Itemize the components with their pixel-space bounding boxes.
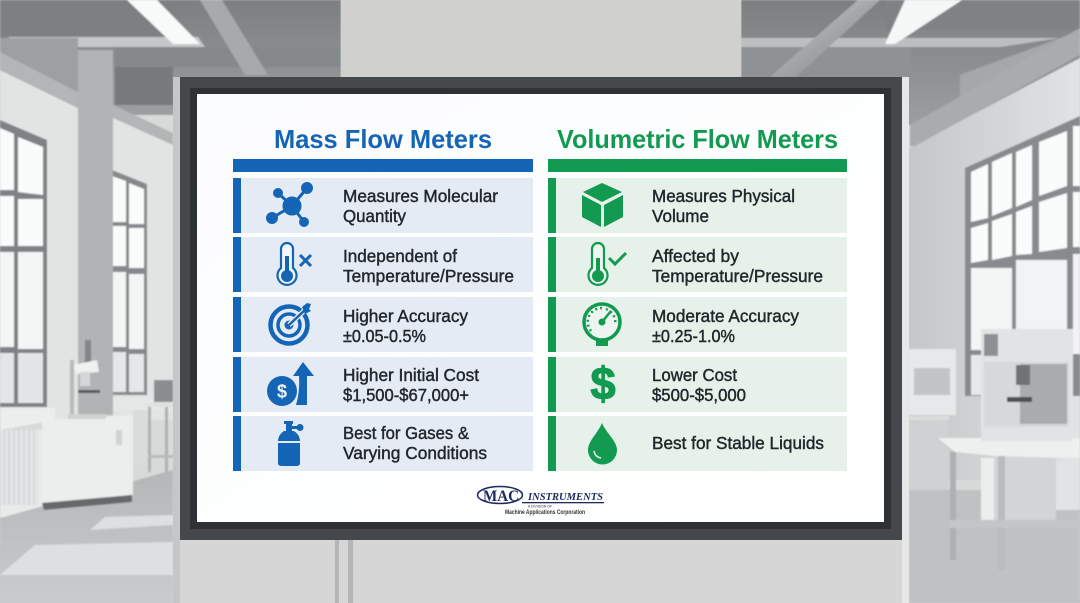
row: higher accuracy: Higher Accuracy — [343, 306, 468, 326]
row: independent of temperature: Temperature/Pressure — [343, 266, 514, 286]
row: affected by temperature: Temperature/Pressure — [652, 266, 823, 286]
row: stable liquids: Best for Stable Liquids — [652, 433, 824, 453]
row: affected by temperature: Affected by — [652, 246, 739, 266]
heading bar blue — [233, 159, 533, 172]
row: lower cost — [548, 357, 847, 412]
left column — [78, 50, 113, 415]
right windows — [965, 116, 1080, 396]
right ceiling — [741, 0, 1080, 125]
row: best for gases: Best for Gases & — [343, 423, 469, 443]
panel: mass flow meters — [233, 124, 533, 471]
row: best for gases — [233, 416, 533, 471]
left sill and lower wall — [0, 408, 55, 430]
left laptop — [154, 380, 173, 402]
row: molecular quantity: Quantity — [343, 206, 406, 226]
row: molecular quantity: Measures Molecular — [343, 186, 498, 206]
icon: target with arrow — [270, 303, 311, 344]
right wall — [909, 58, 1080, 480]
display frame — [180, 77, 902, 540]
radiator — [0, 430, 38, 505]
logo: MAC Instruments: Machine Applications Corporation — [505, 510, 585, 516]
heading: mass flow meters: Mass Flow Meters — [274, 124, 492, 154]
row: molecular quantity — [233, 178, 533, 233]
right background machine — [909, 349, 956, 490]
row: higher accuracy — [233, 297, 533, 352]
row: moderate accuracy: ±0.25-1.0% — [652, 326, 735, 346]
row: lower cost: Lower Cost — [652, 365, 737, 385]
left ceiling — [0, 0, 341, 115]
logo: MAC Instruments: MAC — [483, 488, 519, 505]
row: lower cost: $500-$5,000 — [652, 385, 746, 405]
background table and cabinet — [133, 403, 173, 472]
logo: MAC Instruments: INSTRUMENTS — [527, 492, 603, 503]
panel: volumetric flow meters — [548, 124, 847, 471]
icon: dollar sign: $ — [590, 358, 616, 409]
icon: gas cylinder — [278, 421, 304, 466]
logo: MAC Instruments — [478, 486, 604, 516]
right ducts — [770, 0, 1080, 146]
row: independent of temperature — [233, 237, 533, 292]
concrete pillar behind display — [173, 77, 909, 603]
heading: volumetric flow meters: Volumetric Flow Meters — [557, 124, 838, 154]
microscope — [68, 340, 106, 419]
right lab table — [938, 438, 1080, 570]
right lab machine — [981, 329, 1073, 441]
left upper concrete wall — [0, 38, 78, 92]
right floor — [909, 490, 1080, 603]
icon: water drop — [588, 423, 617, 465]
icon: coin with rising arrow: $ — [277, 382, 287, 402]
heading bar green — [548, 159, 847, 172]
row: higher initial cost — [233, 357, 533, 412]
icon: pressure gauge — [584, 304, 620, 346]
row: independent of temperature: Independent of — [343, 246, 457, 266]
icon: coin with rising arrow — [267, 362, 314, 406]
row: affected by temperature — [548, 237, 847, 292]
row: stable liquids — [548, 416, 847, 471]
left windows — [0, 120, 147, 407]
row: physical volume: Volume — [652, 206, 709, 226]
row: moderate accuracy: Moderate Accuracy — [652, 306, 799, 326]
icon: thermometer with check — [589, 243, 626, 285]
left lab cabinet — [42, 415, 133, 510]
left floor — [0, 470, 173, 603]
row: moderate accuracy — [548, 297, 847, 352]
row: higher initial cost: $1,500-$67,000+ — [343, 385, 469, 405]
mounting pole — [335, 540, 353, 603]
icon: cube — [582, 183, 623, 227]
row: higher accuracy: ±0.05-0.5% — [343, 326, 426, 346]
icon: thermometer with x — [278, 243, 311, 285]
row: higher initial cost: Higher Initial Cost — [343, 365, 479, 385]
logo: MAC Instruments: A DIVISION OF — [528, 504, 552, 508]
central concrete pillar, top — [341, 0, 741, 78]
row: physical volume: Measures Physical — [652, 186, 795, 206]
row: best for gases: Varying Conditions — [343, 443, 487, 463]
row: physical volume — [548, 178, 847, 233]
display screen — [197, 94, 884, 522]
icon: molecule — [266, 182, 312, 226]
left wall — [0, 70, 78, 420]
